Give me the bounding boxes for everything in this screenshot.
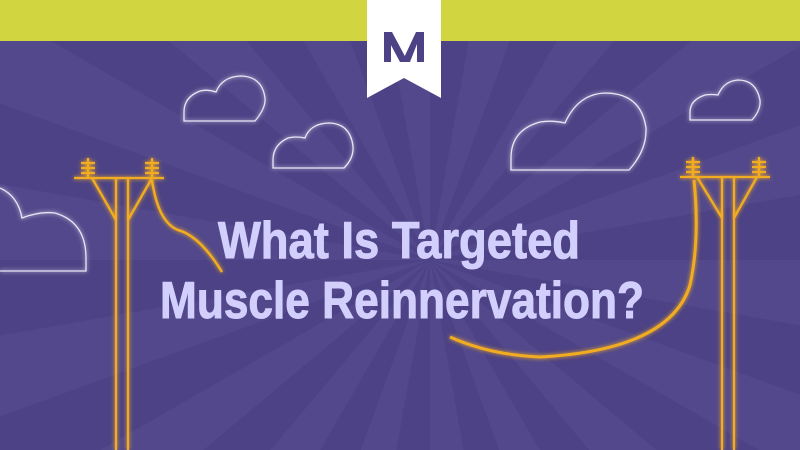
top lime bar <box>0 0 800 41</box>
right power pole <box>450 157 770 450</box>
logo: NM <box>384 32 424 62</box>
title <box>160 212 644 330</box>
title: What Is Targeted <box>218 212 580 270</box>
left power pole <box>74 158 222 450</box>
clouds <box>0 76 760 271</box>
logo bookmark <box>367 0 441 98</box>
title: Muscle Reinnervation? <box>160 272 644 330</box>
